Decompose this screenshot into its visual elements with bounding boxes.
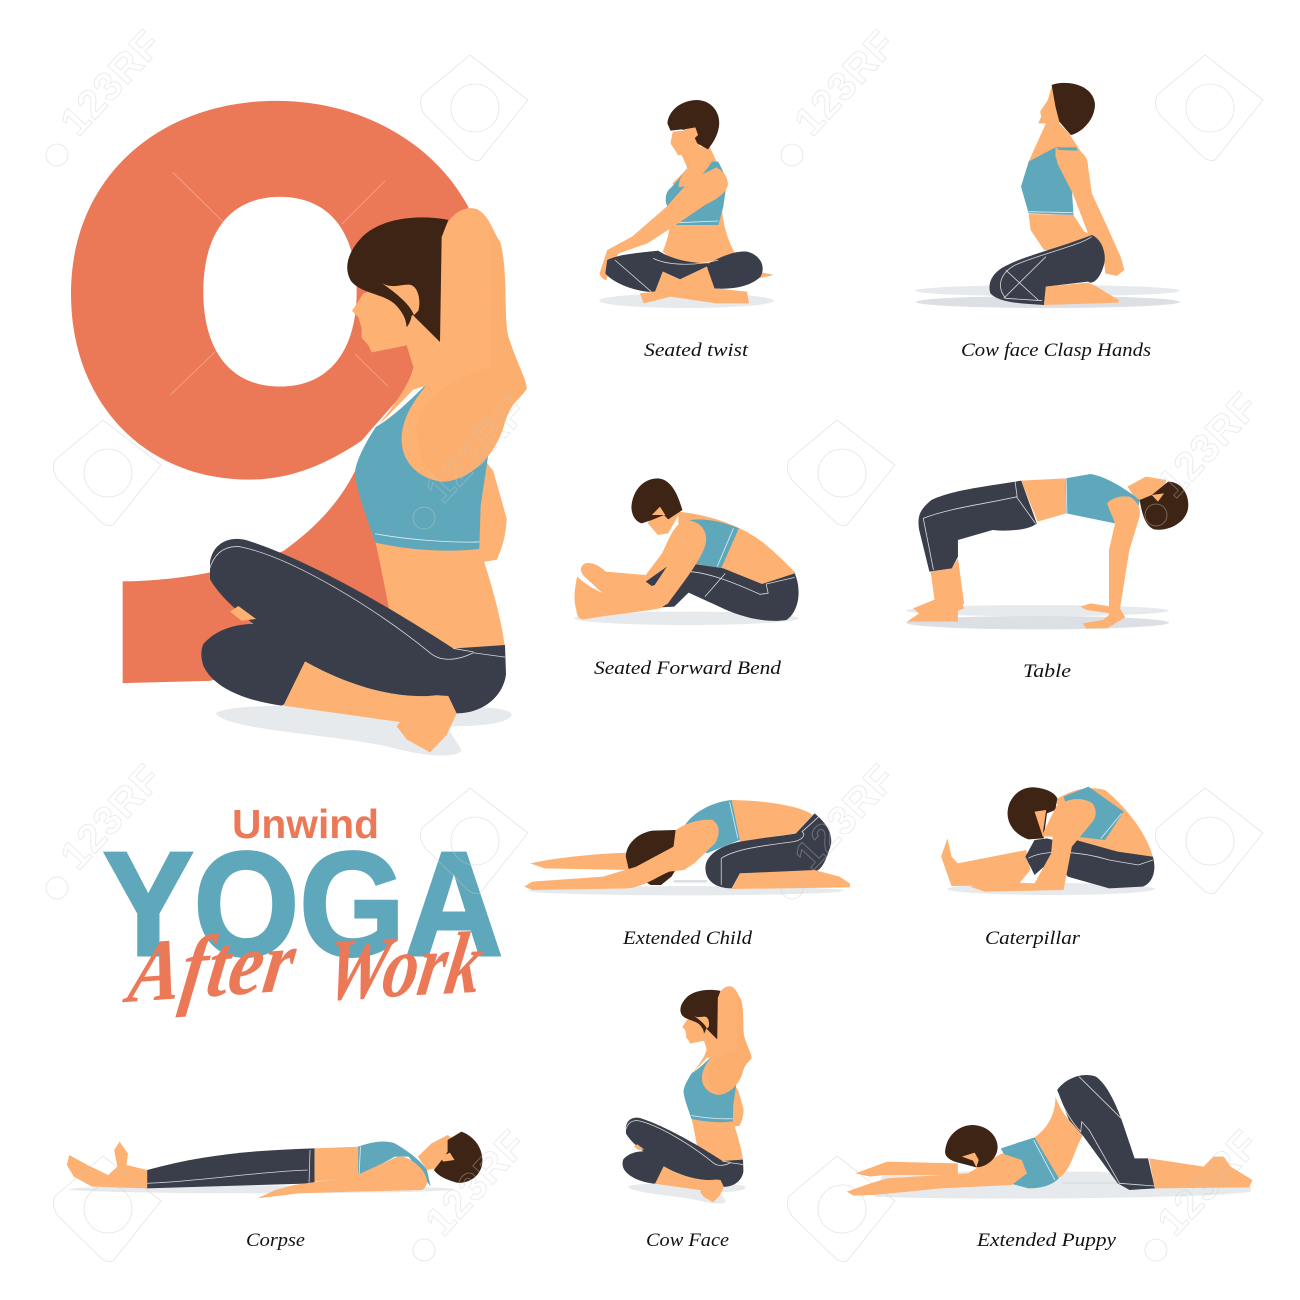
- caption: Corpse: [246, 1230, 305, 1251]
- pose: seated forward bend: [574, 478, 799, 679]
- script words: After Work: Work: [319, 914, 490, 1020]
- text: 123RF: [52, 23, 170, 144]
- text: 123RF: [1149, 385, 1267, 506]
- caption: Cow Face: [646, 1230, 729, 1251]
- figure: seated forward bend: [574, 478, 799, 625]
- figure: cow face pose: [201, 208, 527, 756]
- heading word: YOGA: YOGA: [103, 822, 503, 987]
- figure: table: [906, 474, 1188, 629]
- script words: After Work: After: [119, 912, 303, 1022]
- caption: Seated Forward Bend: [594, 658, 782, 679]
- pose: cow face clasp hands: [916, 83, 1180, 361]
- pose: corpse: [67, 1132, 482, 1251]
- figure: cow face: [622, 986, 752, 1204]
- panel: hero number nine with cow face pose: [71, 101, 527, 756]
- figure: extended puppy: [847, 1075, 1252, 1199]
- text: 123RF: [52, 757, 170, 878]
- caption: Table: [1023, 661, 1071, 682]
- caption: Extended Child: [622, 928, 753, 949]
- heading word: Unwind: Unwind: [232, 801, 379, 847]
- figure: corpse: [67, 1132, 482, 1198]
- pose: caterpillar: [941, 787, 1155, 949]
- figure: extended child: [524, 800, 850, 895]
- text: 123RF: [1149, 1123, 1267, 1244]
- text: 123RF: [786, 757, 904, 878]
- caption: Extended Puppy: [976, 1230, 1117, 1251]
- pose: cow face: [622, 986, 752, 1251]
- text: 123RF: [417, 1123, 535, 1244]
- title: Unwind Yoga After Work: [103, 801, 503, 1022]
- pose: table: [906, 474, 1188, 682]
- figure: cow face clasp hands: [916, 83, 1180, 308]
- caption: Caterpillar: [985, 928, 1081, 949]
- pose: extended puppy: [847, 1075, 1252, 1251]
- caption: Seated twist: [644, 340, 749, 361]
- text: 123RF: [417, 390, 535, 511]
- text: 123RF: [786, 23, 904, 144]
- figure: seated twist: [599, 100, 774, 308]
- number 9: [71, 101, 493, 683]
- caption: Cow face Clasp Hands: [961, 340, 1151, 361]
- script words: After Work: [119, 912, 490, 1022]
- pose: seated twist: [599, 100, 774, 361]
- figure: caterpillar: [941, 787, 1155, 895]
- pose: extended child: [524, 800, 850, 949]
